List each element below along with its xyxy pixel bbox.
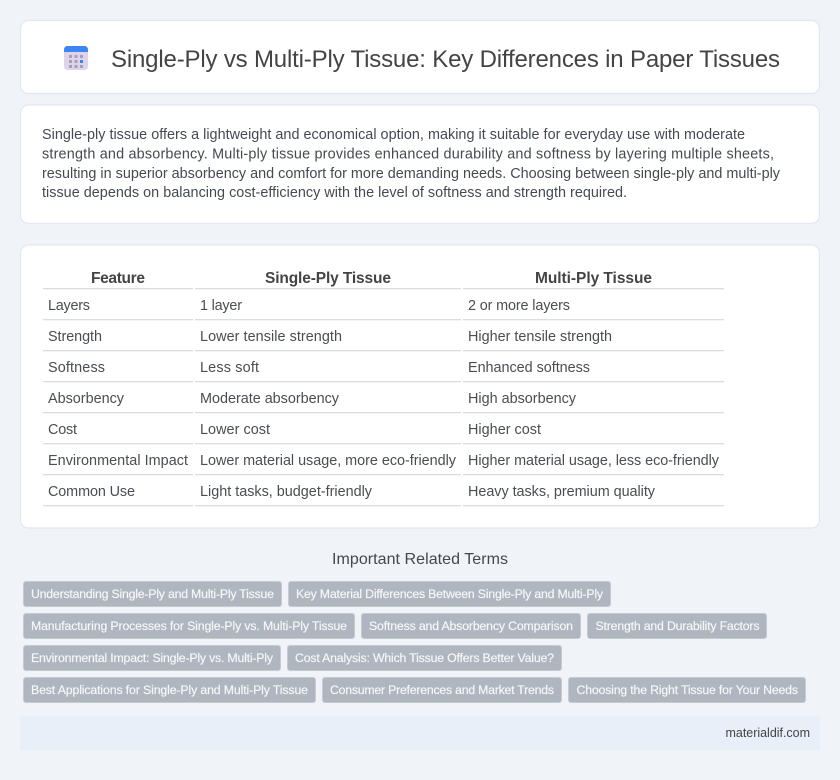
- table header: Single-Ply Tissue: [265, 270, 391, 287]
- row: cost: Cost: [48, 422, 77, 438]
- panel: comparison table: [20, 245, 820, 528]
- chip: strength: [588, 614, 766, 638]
- row: strength: [48, 329, 612, 345]
- intro paragraph: strength and absorbency. Multi-ply tissue provides enhanced durability and softness by layering multiple sheets,: [42, 146, 774, 162]
- row: environmental impact: [48, 453, 720, 469]
- icon: calendar grid: [64, 46, 88, 70]
- chip: consumer preferences: [322, 678, 562, 702]
- row: layers: Layers: [48, 298, 90, 314]
- row: cost: Lower cost: [200, 422, 270, 438]
- intro paragraph: Single-ply tissue offers a lightweight and economical option, making it suitable for everyday use with moderate: [42, 127, 745, 143]
- row: softness: Softness: [48, 360, 105, 376]
- chip: best applications: [24, 678, 316, 702]
- chip: environmental: Environmental Impact: Single-Ply vs. Multi-Ply: [31, 651, 274, 665]
- row: layers: 1 layer: [200, 298, 242, 314]
- related terms heading: Important Related Terms: [332, 551, 508, 568]
- related terms chips: [24, 582, 806, 702]
- row: absorbency: High absorbency: [468, 391, 577, 407]
- row: strength: Lower tensile strength: [200, 329, 342, 345]
- chip: environmental: [24, 646, 280, 670]
- chip: understanding: Understanding Single-Ply and Multi-Ply Tissue: [31, 587, 274, 601]
- table rules: [43, 288, 724, 506]
- row: common use: [48, 484, 656, 500]
- row: absorbency: Absorbency: [48, 391, 125, 407]
- row: common use: Light tasks, budget-friendly: [200, 484, 373, 500]
- chip: manufacturing: [24, 614, 354, 638]
- title: Single-Ply vs Multi-Ply Tissue: Key Differences in Paper Tissues: [111, 46, 780, 73]
- row: environmental impact: Lower material usage, more eco-friendly: [200, 453, 457, 469]
- chip: consumer preferences: Consumer Preferences and Market Trends: [330, 683, 554, 697]
- chip: manufacturing: Manufacturing Processes for Single-Ply vs. Multi-Ply Tissue: [31, 619, 347, 633]
- row: layers: 2 or more layers: [468, 298, 570, 314]
- row: absorbency: Moderate absorbency: [200, 391, 340, 407]
- row: layers: [48, 298, 570, 314]
- row: strength: Higher tensile strength: [468, 329, 612, 345]
- row: cost: Higher cost: [468, 422, 541, 438]
- footer site name: materialdif.com: [726, 726, 810, 740]
- chip: softness: Softness and Absorbency Comparison: [369, 619, 573, 633]
- row: softness: Enhanced softness: [468, 360, 590, 376]
- chip: cost analysis: [288, 646, 562, 670]
- footer: [20, 716, 820, 750]
- row: absorbency: [48, 391, 577, 407]
- table header: [91, 270, 652, 287]
- chip: best applications: Best Applications for Single-Ply and Multi-Ply Tissue: [31, 683, 308, 697]
- row: softness: Less soft: [200, 360, 259, 376]
- intro paragraph: [42, 127, 781, 201]
- row: environmental impact: Higher material usage, less eco-friendly: [468, 453, 720, 469]
- chip: strength: Strength and Durability Factors: [596, 619, 760, 633]
- chip: understanding: [24, 582, 282, 606]
- row: common use: Common Use: [48, 484, 135, 500]
- row: common use: Heavy tasks, premium quality: [468, 484, 656, 500]
- row: cost: [48, 422, 541, 438]
- intro paragraph: tissue depends on balancing cost-efficiency with the level of softness and strength required.: [42, 185, 627, 201]
- chip: softness: [362, 614, 580, 638]
- chip: choosing: [568, 678, 806, 702]
- header panel: [20, 20, 820, 94]
- row: strength: Strength: [48, 329, 102, 345]
- chip: cost analysis: Cost Analysis: Which Tissue Offers Better Value?: [295, 651, 554, 665]
- row: softness: [48, 360, 590, 376]
- panel: introduction: [20, 105, 820, 224]
- chip: choosing: Choosing the Right Tissue for Your Needs: [576, 683, 798, 697]
- row: environmental impact: Environmental Impact: [48, 453, 188, 469]
- intro paragraph: resulting in superior absorbency and comfort for more demanding needs. Choosing between single-ply and multi-ply: [42, 166, 781, 182]
- chip: material differences: [288, 582, 610, 606]
- chip: material differences: Key Material Differences Between Single-Ply and Multi-Ply: [296, 587, 604, 601]
- table header: Multi-Ply Tissue: [535, 270, 652, 287]
- table header: Feature: [91, 270, 145, 287]
